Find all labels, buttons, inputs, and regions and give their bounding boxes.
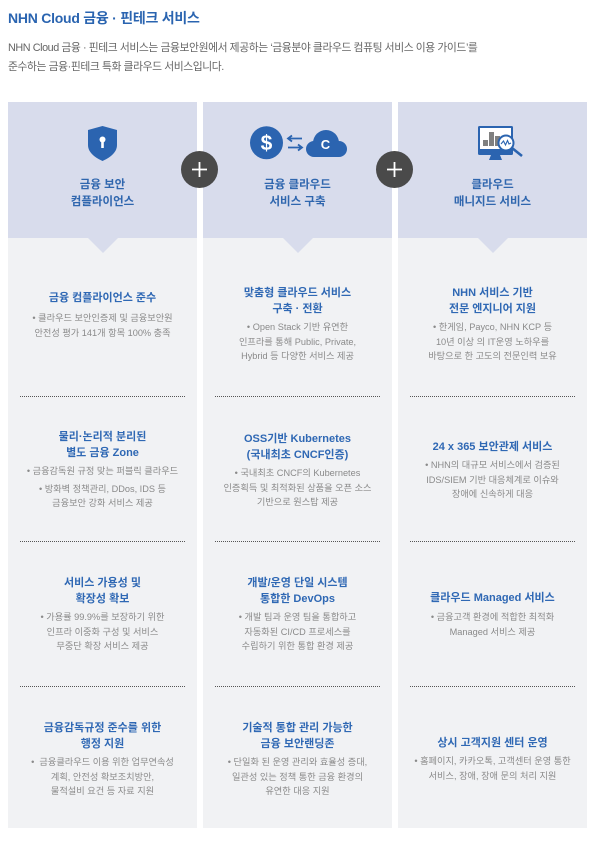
item: security monitoring: • NHN의 대규모 서비스에서 검증된 <box>425 460 560 470</box>
item: compliance: 금융 컴플라이언스 준수 <box>49 292 156 304</box>
item: landing zone: 유연한 대응 지원 <box>265 786 330 796</box>
item: compliance: 안전성 평가 141개 항목 100% 충족 <box>34 328 171 338</box>
item: managed service: 클라우드 Managed 서비스 <box>430 592 555 604</box>
item: landing zone <box>228 722 367 796</box>
item: availability: 확장성 확보 <box>76 593 129 605</box>
header pointer <box>282 238 312 253</box>
item: admin support: • 금융클라우드 이용 위한 업무연속성 <box>31 757 174 767</box>
item: customer support: 상시 고객지원 센터 운영 <box>437 737 548 749</box>
item: compliance <box>32 292 173 338</box>
item: admin support: 계획, 안전성 확보조치방안, <box>51 772 154 782</box>
icon: dollar to cloud: C <box>321 137 331 152</box>
item: availability <box>40 576 164 651</box>
intro text: NHN Cloud 금융 · 핀테크 서비스는 금융보안원에서 제공하는 ‘금융분야 클라우드 컴퓨팅 서비스 이용 가이드’를 <box>8 42 477 54</box>
item: managed service: Managed 서비스 제공 <box>450 626 535 636</box>
header pointer <box>478 238 508 253</box>
item: admin support: 물적설비 요건 등 자료 지원 <box>51 786 154 796</box>
header label: 금융 클라우드 <box>264 179 331 191</box>
item: landing zone: 금융 보안랜딩존 <box>261 738 334 750</box>
item: availability: • 가용률 99.9%를 보장하기 위한 <box>40 612 164 622</box>
intro text: 준수하는 금융·핀테크 특화 클라우드 서비스입니다. <box>8 61 224 73</box>
item: availability: 인프라 이중화 구성 및 서비스 <box>47 626 158 636</box>
item: customer support: 서비스, 장애, 장애 문의 처리 지원 <box>429 770 556 780</box>
panel header <box>203 102 392 238</box>
header label: 금융 보안 <box>80 179 125 191</box>
item: devops <box>239 576 356 651</box>
item: security monitoring: 장애에 신속하게 대응 <box>452 489 533 499</box>
item: landing zone: 일관성 있는 정책 통한 금융 환경의 <box>232 772 363 782</box>
header label: 컴플라이언스 <box>71 196 134 208</box>
intro text <box>8 42 478 73</box>
item: admin support <box>31 722 174 796</box>
item: customer support <box>414 736 571 780</box>
item: kubernetes: (국내최초 CNCF인증) <box>247 449 348 461</box>
item: devops: 수립하기 위한 통합 환경 제공 <box>242 641 353 651</box>
icon: shield <box>88 126 117 161</box>
panel: financial cloud build <box>203 102 392 828</box>
item: custom cloud: 인프라를 통해 Public, Private, <box>239 336 356 346</box>
item: security monitoring <box>425 440 560 499</box>
icon: dollar to cloud <box>250 126 347 160</box>
item: kubernetes <box>223 432 372 507</box>
item: separated zone: • 금융감독원 규정 맞는 퍼블릭 클라우드 <box>27 466 178 476</box>
item: availability: 서비스 가용성 및 <box>64 577 141 589</box>
item: expert engineers <box>428 286 557 361</box>
panel: managed cloud service <box>398 102 587 828</box>
item: kubernetes: • 국내최초 CNCF의 Kubernetes <box>235 468 360 478</box>
item: security monitoring: IDS/SIEM 기반 대응체계로 이슈와 <box>426 474 559 484</box>
header label: 서비스 구축 <box>269 196 326 208</box>
item: customer support: • 홈페이지, 카카오톡, 고객센터 운영 통한 <box>414 756 571 766</box>
item: expert engineers: • 한게임, Payco, NHN KCP 등 <box>433 322 552 332</box>
item: managed service: • 금융고객 환경에 적합한 최적화 <box>431 612 554 622</box>
item: separated zone: 별도 금융 Zone <box>66 447 139 459</box>
item: admin support: 행정 지원 <box>81 738 124 750</box>
header pointer <box>88 238 118 253</box>
header label <box>264 178 331 208</box>
icon: plus 1 <box>181 151 218 188</box>
item: custom cloud: Hybrid 등 다양한 서비스 제공 <box>241 351 354 361</box>
item: custom cloud: 맞춤형 클라우드 서비스 <box>244 287 351 299</box>
item: compliance: • 클라우드 보안인증제 및 금융보안원 <box>32 313 173 323</box>
item: expert engineers: 10년 이상 의 IT운영 노하우를 <box>436 336 549 346</box>
item: kubernetes: OSS기반 Kubernetes <box>244 433 351 445</box>
item: devops: 자동화된 CI/CD 프로세스를 <box>244 626 351 636</box>
item: devops: 통합한 DevOps <box>260 593 335 605</box>
panel header <box>398 102 587 238</box>
item: separated zone: • 방화벽 정책관리, DDos, IDS 등 <box>39 484 166 494</box>
header label: 클라우드 <box>471 179 514 191</box>
item: landing zone: 기술적 통합 관리 가능한 <box>242 722 353 734</box>
item: expert engineers: NHN 서비스 기반 <box>452 287 533 299</box>
item: kubernetes: 기반으로 원스탑 제공 <box>257 497 338 507</box>
item: expert engineers: 바탕으로 한 고도의 전문인력 보유 <box>428 351 557 361</box>
item: availability: 무중단 확장 서비스 제공 <box>56 641 149 651</box>
item: separated zone: 물리·논리적 분리된 <box>59 431 146 443</box>
item: admin support: 금융감독규정 준수를 위한 <box>44 722 161 734</box>
panel header <box>8 102 197 238</box>
item: devops: 개발/운영 단일 시스템 <box>247 577 348 589</box>
item: devops: • 개발 팀과 운영 팀을 통합하고 <box>239 612 356 622</box>
item: kubernetes: 인증획득 및 최적화된 상품을 오픈 소스 <box>223 482 372 492</box>
item: landing zone: • 단일화 된 운영 관리와 효율성 증대, <box>228 757 367 767</box>
item: custom cloud <box>239 286 356 361</box>
title: NHN Cloud 금융 · 핀테크 서비스 <box>8 10 200 26</box>
item: custom cloud: • Open Stack 기반 유연한 <box>247 322 348 332</box>
item: separated zone <box>27 430 178 508</box>
item: expert engineers: 전문 엔지니어 지원 <box>449 303 536 315</box>
icon: plus 2 <box>376 151 413 188</box>
item: separated zone: 금융보안 강화 서비스 제공 <box>52 498 153 508</box>
header label <box>71 178 134 208</box>
item: custom cloud: 구축 · 전환 <box>272 303 323 315</box>
icon: monitor with magnifier <box>478 126 523 160</box>
header label <box>454 178 531 208</box>
item: managed service <box>430 592 555 637</box>
panel: financial security compliance <box>8 102 197 828</box>
icon: dollar to cloud: $ <box>261 132 273 155</box>
header label: 매니지드 서비스 <box>454 196 531 208</box>
item: security monitoring: 24 x 365 보안관제 서비스 <box>433 441 552 453</box>
